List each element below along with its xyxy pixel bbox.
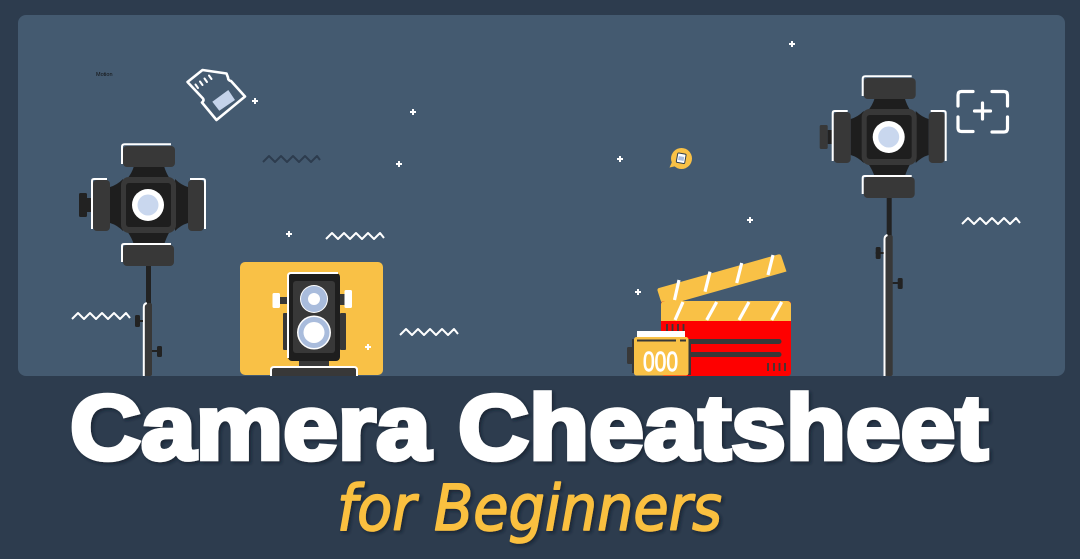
icon: studio light right	[820, 76, 946, 376]
zigzag: lower center white	[400, 329, 458, 335]
icon: focus frame	[958, 92, 1008, 132]
icon: memory card	[188, 70, 245, 120]
panel: illustration scene	[18, 15, 1065, 377]
zigzag: center white	[326, 233, 384, 239]
icon: speech bubble badge	[670, 148, 692, 169]
icon: studio light left	[79, 144, 205, 376]
icon: clapperboard and film canister	[627, 254, 791, 377]
clapper body	[661, 301, 791, 376]
label: Motion: Motion	[96, 72, 113, 78]
film canister: 000	[643, 346, 678, 377]
card: twin-lens reflex camera	[240, 262, 383, 376]
clapper arm	[657, 254, 786, 306]
zigzag: left white	[72, 313, 130, 319]
zigzag: dark upper left	[263, 156, 320, 162]
sparkles	[252, 41, 795, 295]
zigzag: right white	[962, 218, 1020, 224]
subheading: for Beginners: for Beginners	[337, 472, 722, 545]
heading: Camera Cheatsheet: Camera Cheatsheet	[70, 377, 988, 479]
film canister	[627, 331, 691, 377]
